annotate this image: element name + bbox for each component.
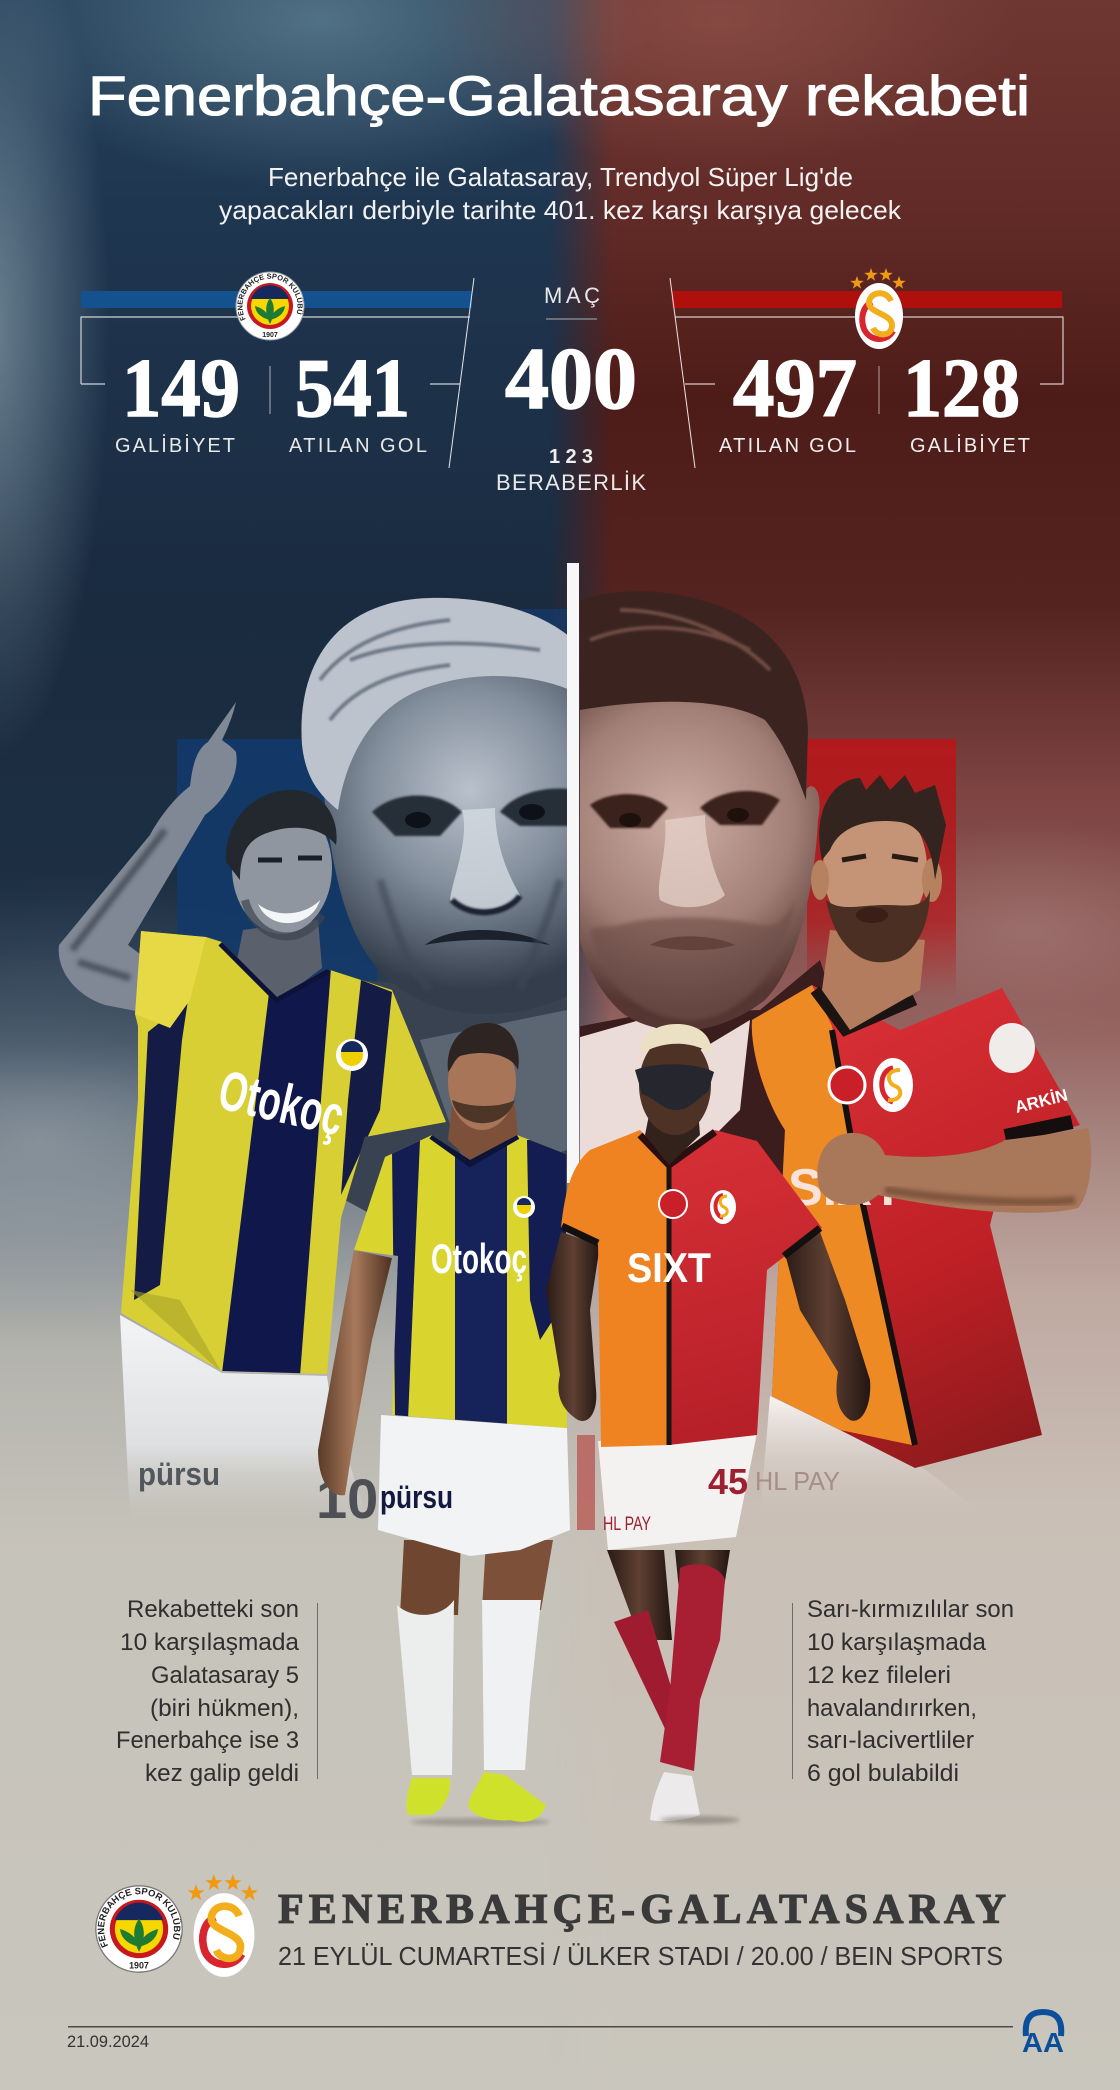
kit: orange and red jersey — [561, 1130, 822, 1447]
title: Fenerbahçe-Galatasaray rekabeti — [88, 64, 1030, 127]
shorts sponsor: HL PAY — [755, 1466, 840, 1496]
text block: right note: Sarı-kırmızılılar son — [807, 1596, 1014, 1623]
date: 21.09.2024 — [67, 2032, 149, 2051]
text block: left note: Rekabetteki son — [127, 1596, 299, 1623]
shorts — [378, 1415, 570, 1556]
subtitle: yapacakları derbiyle tarihte 401. kez karşı karşıya gelecek — [219, 195, 902, 225]
text block: right note: 6 gol bulabildi — [807, 1760, 959, 1787]
text block: right note: havalandırırken, — [807, 1695, 977, 1722]
player: Galatasaray, masked, centre — [546, 1024, 870, 1824]
stat: 149 wins: 149 — [122, 342, 240, 435]
subtitle: Fenerbahçe ile Galatasaray, Trendyol Süper Lig'de — [268, 162, 853, 192]
player: Fenerbahçe, walking, centre — [318, 1023, 570, 1826]
crests on chest — [829, 1023, 1035, 1112]
text block: right note: 12 kez fileleri — [807, 1662, 951, 1689]
stat: 128 wins: 128 — [903, 342, 1020, 435]
text block: right note — [807, 1596, 1014, 1787]
coach: Fenerbahçe, greyscale portrait — [301, 598, 567, 1212]
sponsor: Otokoç: Otokoç — [431, 1235, 527, 1282]
text block: left note: (biri hükmen), — [150, 1695, 299, 1722]
head and mask — [635, 1024, 714, 1165]
text block: left note: Galatasaray 5 — [151, 1662, 299, 1689]
panel: match totals: MAÇ — [544, 283, 600, 308]
shadows under feet — [410, 1818, 550, 1826]
player: Galatasaray, running, right — [752, 775, 1091, 1515]
legs and socks — [607, 1550, 730, 1771]
text block: left note: kez galip geldi — [145, 1760, 299, 1787]
shorts — [120, 1315, 368, 1520]
crest — [336, 1039, 368, 1071]
shadow under foot — [660, 1816, 740, 1824]
head — [226, 790, 337, 1002]
crest — [513, 1196, 535, 1218]
panel: Fenerbahçe stats — [80, 272, 474, 468]
coach: Galatasaray, sepia portrait — [580, 591, 824, 1239]
shorts sponsor: pürsu — [380, 1479, 453, 1515]
logo: Fenerbahçe bottom: 1907 — [129, 1960, 149, 1970]
text block: left note: 10 karşılaşmada — [120, 1629, 300, 1656]
shorts — [760, 1396, 985, 1515]
logo: Fenerbahçe top: 1907 — [262, 332, 278, 339]
match details: 21 EYLÜL CUMARTESİ / ÜLKER STADI / 20.00 / BEIN SPORTS — [278, 1941, 1003, 1971]
text block: right note: sarı-lacivertliler — [807, 1727, 974, 1754]
sleeve sponsor: ARKİN — [1013, 1086, 1070, 1117]
text block: right note: 10 karşılaşmada — [807, 1629, 987, 1656]
stat: 149 wins: GALİBİYET — [115, 434, 235, 457]
chest sponsor: SIXT: SIXT — [788, 1159, 904, 1217]
text block: left note — [116, 1596, 300, 1787]
boots — [406, 1772, 546, 1822]
head — [448, 1023, 519, 1170]
logo: Anadolu Agency: AA — [1022, 2027, 1064, 2058]
raised arm — [59, 702, 237, 1012]
crests on chest — [659, 1190, 736, 1224]
player: Fenerbahçe, pointing up, left — [59, 702, 460, 1530]
stat: 541 goals: ATILAN GOL — [289, 435, 427, 457]
stat: 541 goals: 541 — [295, 342, 410, 435]
logo: Galatasaray top — [850, 268, 906, 349]
kit: orange and red jersey — [752, 985, 1080, 1468]
match heading: FENERBAHÇE-GALATASARAY — [278, 1887, 1006, 1933]
arms — [546, 1232, 870, 1421]
panel: match totals: 400 — [505, 331, 637, 428]
stat: 128 wins: GALİBİYET — [910, 434, 1030, 457]
logo: Fenerbahçe bottom: FENERBAHÇE SPOR KULÜBÜ — [98, 1888, 182, 1948]
left arm — [318, 1250, 392, 1495]
logo: Anadolu Agency — [1022, 2012, 1064, 2058]
kit: striped jersey — [350, 1130, 570, 1435]
logo: Galatasaray bottom — [188, 1874, 258, 1977]
logo: Fenerbahçe top: FENERBAHÇE SPOR KULÜBÜ — [237, 274, 304, 321]
decorative colour blocks behind players — [177, 609, 956, 1530]
stat: 497 goals: ATILAN GOL — [719, 435, 856, 457]
legs and socks — [397, 1540, 553, 1775]
text block: left note: Fenerbahçe ise 3 — [116, 1727, 299, 1754]
neck and head — [811, 775, 946, 1030]
panel: match totals — [496, 283, 646, 495]
boot — [650, 1772, 700, 1821]
panel: Galatasaray stats — [670, 268, 1063, 468]
footer rule — [68, 2026, 1013, 2028]
stat: 497 goals: 497 — [733, 342, 857, 435]
sponsor: Otokoç: Otokoç — [213, 1058, 350, 1148]
subtitle — [219, 162, 902, 225]
kit: yellow and navy striped jersey — [121, 931, 446, 1374]
shorts sponsor: HL PAY — [603, 1514, 651, 1535]
shorts — [598, 1433, 757, 1550]
panel: match totals: BERABERLİK — [496, 470, 646, 495]
bent arm and fist — [817, 1128, 1091, 1213]
center divider — [567, 563, 579, 1183]
shirt number: 10 — [316, 1467, 378, 1530]
shirt number: 45 — [708, 1461, 748, 1502]
panel: match totals: 123 — [549, 446, 593, 468]
chest sponsor: SIXT: SIXT — [627, 1244, 711, 1291]
shorts sponsor: pürsu — [138, 1456, 220, 1492]
background: split navy and maroon fading to grey paper — [0, 0, 1120, 1496]
